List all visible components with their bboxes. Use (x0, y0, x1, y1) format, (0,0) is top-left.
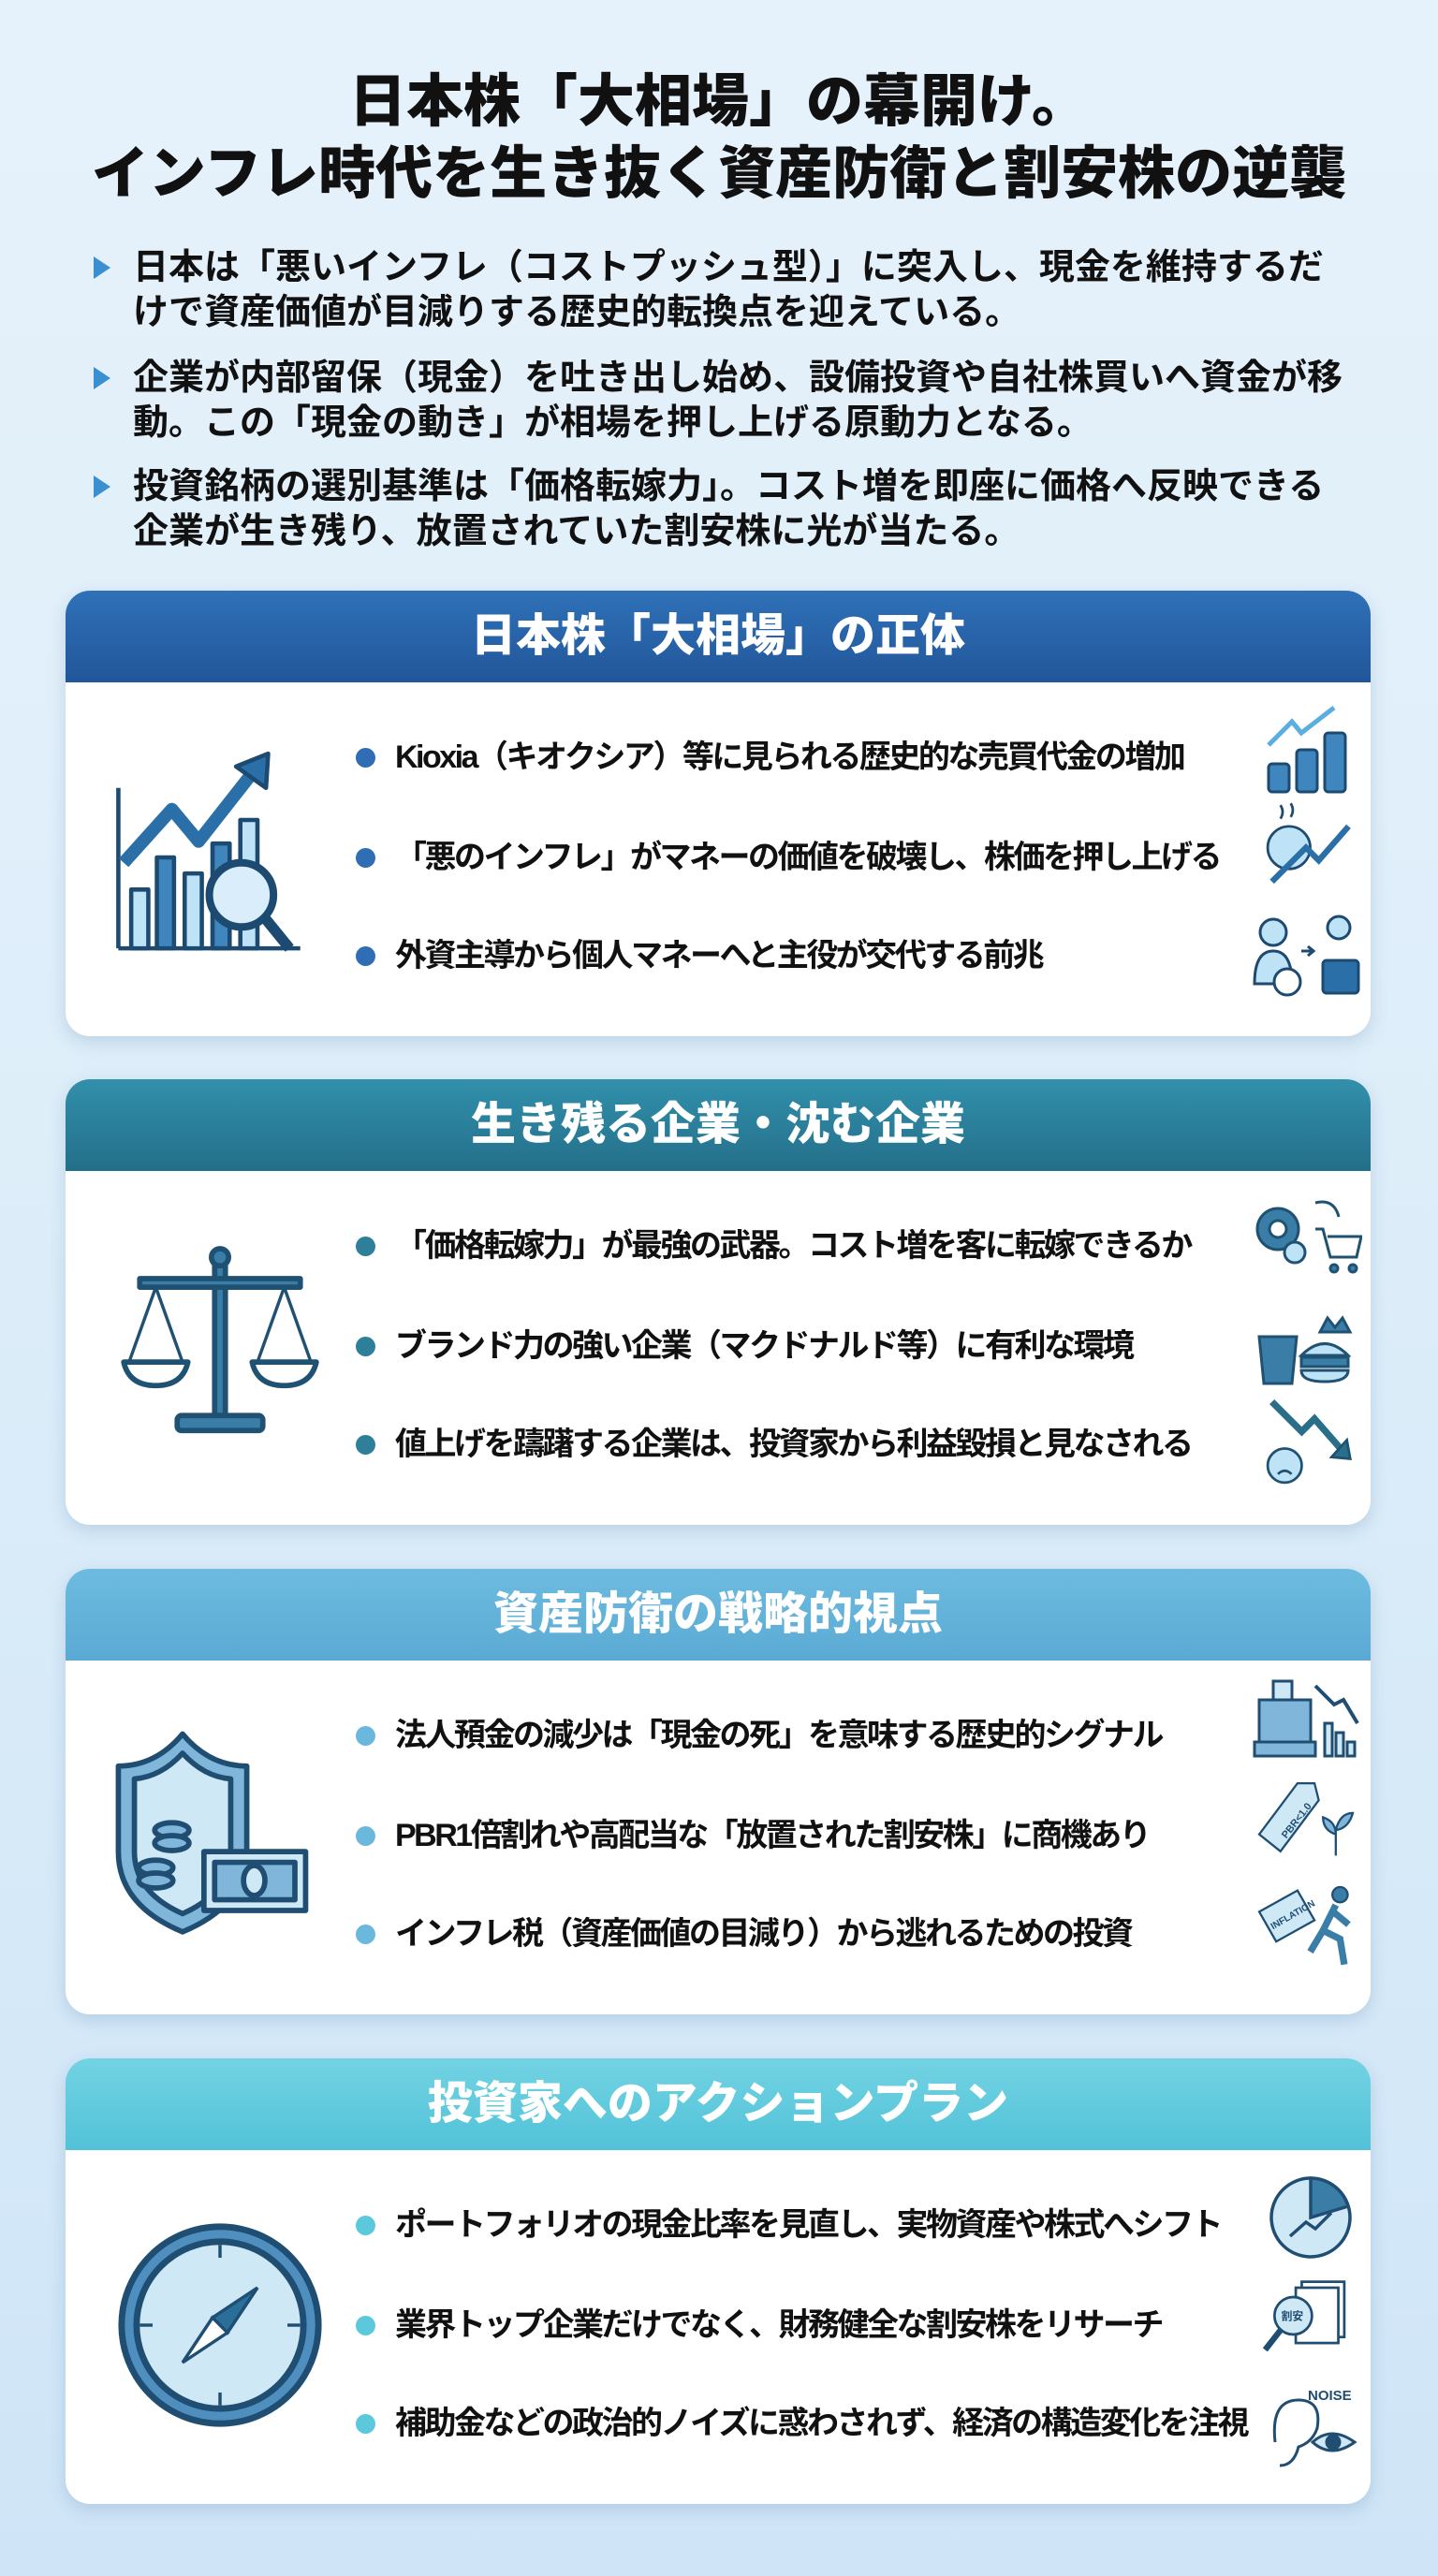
intro bullet 3: 企業が生き残り、放置されていた割安株に光が当たる。 (133, 512, 1020, 551)
icon: magnifier documents: 割安 (1282, 2308, 1303, 2324)
row 2: 業界トップ企業だけでなく、財務健全な割安株をリサーチ (395, 2307, 1162, 2343)
intro bullet 3: 投資銘柄の選別基準は「価格転嫁力」。コスト増を即座に価格へ反映できる (133, 467, 1324, 506)
panel heading: 投資家へのアクションプラン (428, 2079, 1008, 2129)
icon: person globe wallet (1253, 915, 1359, 996)
icon: magnifier documents (1262, 2280, 1346, 2351)
intro bullet 1: けで資産価値が目減りする歴史的転換点を迎えている。 (133, 293, 1020, 332)
icon: tag and sprout (1258, 1782, 1354, 1855)
panel: 生き残る企業・沈む企業 (66, 1079, 1371, 1525)
icon: inflation tax running (1258, 1885, 1351, 1966)
icon: compass (118, 2223, 322, 2427)
row 2: ブランド力の強い企業（マクドナルド等）に有利な環境 (395, 1328, 1133, 1364)
row 1: 法人預金の減少は「現金の死」を意味する歴史的シグナル (395, 1718, 1162, 1753)
icon: shield with money (116, 1732, 309, 1935)
icon: inflation tax running: INFLATION (1269, 1898, 1317, 1932)
row 2: PBR1倍割れや高配当な「放置された割安株」に商機あり (395, 1818, 1149, 1853)
icon: broken coin arrow (1266, 803, 1351, 884)
intro bullet 3 (94, 467, 1324, 551)
icon: tag and sprout: PBR<1.0 (1280, 1801, 1314, 1841)
panel heading: 日本株「大相場」の正体 (471, 611, 965, 661)
icon: register down chart (1253, 1679, 1359, 1758)
panel heading (66, 2058, 1371, 2150)
panel: 日本株「大相場」の正体 (66, 591, 1371, 1036)
panel heading (66, 591, 1371, 682)
panel heading: 生き残る企業・沈む企業 (471, 1100, 965, 1149)
row 2: 「悪のインフレ」がマネーの価値を破壊し、株価を押し上げる (395, 840, 1220, 875)
icon: fries burger crown (1257, 1315, 1352, 1385)
icon: chart with magnifier (116, 751, 301, 952)
icon: ear eye noise: NOISE (1308, 2388, 1352, 2404)
row 3: 値上げを躊躇する企業は、投資家から利益毀損と見なされる (395, 1427, 1191, 1462)
intro bullet 1: 日本は「悪いインフレ（コストプッシュ型）」に突入し、現金を維持するだ (133, 248, 1324, 287)
panel heading (66, 1079, 1371, 1171)
intro bullet 2 (94, 358, 1343, 443)
row 3: 外資主導から個人マネーへと主役が交代する前兆 (395, 938, 1042, 973)
row 1: 「価格転嫁力」が最強の武器。コスト増を客に転嫁できるか (395, 1228, 1191, 1264)
panel: 資産防衛の戦略的視点 (66, 1569, 1371, 2014)
icon: scales (121, 1246, 319, 1434)
icon: pie chart (1269, 2176, 1352, 2259)
panel: 投資家へのアクションプラン (66, 2058, 1371, 2504)
icon: down arrow sad face (1266, 1399, 1352, 1485)
icon: coins up (1267, 706, 1346, 794)
icon: gear cart (1256, 1200, 1362, 1273)
intro bullet 1 (94, 248, 1324, 332)
panel heading (66, 1569, 1371, 1661)
icon: ear eye noise (1273, 2388, 1357, 2467)
panel heading: 資産防衛の戦略的視点 (493, 1589, 943, 1639)
row 3: 補助金などの政治的ノイズに惑わされず、経済の構造変化を注視 (395, 2406, 1247, 2441)
intro bullet 2: 企業が内部留保（現金）を吐き出し始め、設備投資や自社株買いへ資金が移 (133, 359, 1343, 398)
title (92, 69, 1346, 205)
intro bullet 2: 動。この「現金の動き」が相場を押し上げる原動力となる。 (133, 403, 1093, 443)
row 3: インフレ税（資産価値の目減り）から逃れるための投資 (395, 1916, 1131, 1952)
row 1: Kioxia（キオクシア）等に見られる歴史的な売買代金の増加 (395, 739, 1183, 775)
title: インフレ時代を生き抜く資産防衛と割安株の逆襲 (92, 141, 1346, 205)
title: 日本株「大相場」の幕開け。 (349, 69, 1089, 133)
row 1: ポートフォリオの現金比率を見直し、実物資産や株式へシフト (395, 2207, 1221, 2243)
